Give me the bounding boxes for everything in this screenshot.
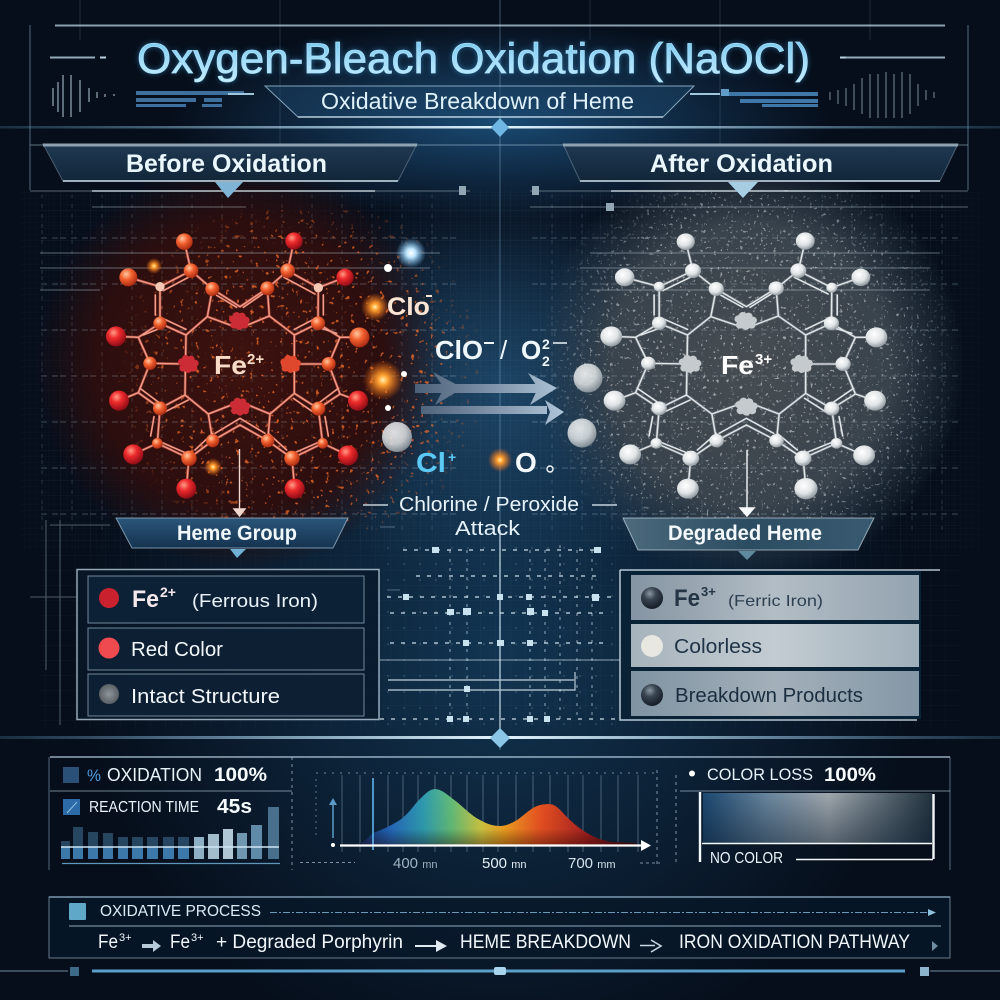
metric: color loss: COLOR LOSS [707, 765, 813, 784]
row: red color: Red Color [131, 639, 223, 661]
spectrum chart: 700 mm [568, 855, 616, 872]
colour loss gauge [700, 792, 934, 867]
header divider with diamond [0, 118, 1000, 137]
metric: reaction time [63, 796, 252, 818]
metric: percent oxidation [63, 765, 267, 786]
attack label: Chlorine / Peroxide [399, 494, 579, 516]
title: Oxygen-Bleach Oxidation (NaOCl) [137, 35, 810, 83]
process pathway: 3+ [119, 932, 132, 944]
footer rule [0, 967, 1000, 976]
metric: reaction time: REACTION TIME [89, 799, 199, 816]
banner: Degraded Heme: Degraded Heme [668, 522, 822, 545]
attack label: Attack [455, 518, 521, 540]
radical label: Cl+: + [448, 449, 456, 465]
label: Fe2+: Fe [214, 350, 247, 380]
banner: After Oxidation: After Oxidation [650, 150, 833, 178]
process pathway: Fe [98, 932, 118, 953]
row: colorless: Colorless [674, 636, 762, 658]
row: red color [88, 628, 364, 670]
data blocks right [690, 89, 818, 107]
label: Fe3+: Fe [721, 350, 754, 380]
label: Fe3+ [721, 350, 772, 380]
reagent label: ClO- / O2 2-: ClO [435, 335, 483, 365]
subtitle banner [265, 86, 694, 117]
reagent label: ClO- / O2 2-: 2 [542, 336, 550, 352]
radical label: Cl+ [416, 447, 456, 478]
panel glow: red molecule backdrop [20, 150, 500, 580]
row: breakdown products [631, 671, 919, 716]
panel: heme group properties [77, 570, 379, 720]
process pathway: 3+ [191, 932, 204, 944]
data blocks left [136, 91, 254, 107]
row: Fe3+ ferric iron: (Ferric Iron) [728, 593, 823, 610]
grid lines behind molecules [30, 186, 968, 535]
label: Fe2+: 2+ [247, 351, 264, 368]
metric: color loss [689, 765, 876, 786]
reagent label: ClO- / O2 2- [435, 335, 567, 369]
glow sparks between panels [146, 238, 512, 476]
banner: Degraded Heme [623, 518, 874, 560]
reaction arrows [415, 372, 564, 425]
main lower divider [0, 728, 1000, 748]
banner: Before Oxidation [43, 144, 417, 198]
reagent label: ClO-: Clo [387, 293, 430, 321]
banner: Heme Group: Heme Group [177, 522, 297, 545]
spectrum chart: 500 mn [482, 855, 526, 872]
particles: orange sparks [116, 210, 486, 530]
process pathway: IRON OXIDATION PATHWAY [679, 932, 910, 953]
bonds: white skeleton [611, 241, 876, 489]
row: Fe3+ ferric iron: 3+ [701, 584, 716, 599]
radical label: O. [515, 447, 553, 478]
metric: percent oxidation: % [87, 766, 101, 785]
title: Oxygen-Bleach Oxidation (NaOCl) [137, 35, 810, 83]
atoms: inner white [641, 263, 851, 466]
reagent label: ClO- / O2 2-: 2 [542, 353, 550, 369]
iron clusters: red [178, 312, 301, 416]
row: Fe2+ ferrous iron: (Ferrous Iron) [192, 591, 318, 611]
row: colorless [631, 624, 919, 667]
spectrum chart: 400 mn [393, 855, 437, 872]
row: Fe3+ ferric iron: Fe [674, 585, 700, 612]
metric: color loss: 100% [824, 765, 876, 786]
radical label: Cl+: Cl [416, 447, 446, 478]
atoms: outer red [106, 232, 369, 499]
waveform left [53, 75, 114, 117]
label: Fe3+: 3+ [755, 351, 772, 368]
attack label [363, 494, 617, 540]
panel: degraded heme properties [620, 570, 940, 720]
subtitle banner: Oxidative Breakdown of Heme [321, 88, 634, 114]
arrow: molecule to heme group [234, 449, 245, 516]
process heading [69, 903, 936, 920]
row: intact structure [88, 674, 364, 716]
panel: oxidative process [49, 897, 950, 958]
row: Fe2+ ferrous iron: Fe [132, 586, 159, 613]
process pathway: + Degraded Porphyrin [216, 932, 403, 953]
molecule: red heme group before oxidation [106, 232, 369, 499]
spectrum chart [300, 773, 660, 872]
row: breakdown products: Breakdown Products [675, 685, 863, 707]
row: intact structure: Intact Structure [131, 686, 280, 708]
radical label: O.: O [515, 447, 537, 478]
iron clusters: white [679, 312, 813, 416]
side grid left lower [30, 520, 400, 725]
molecule: grey degraded heme after oxidation [600, 232, 887, 499]
process pathway [98, 932, 938, 953]
metric: reaction time: 45s [217, 796, 252, 818]
colour loss gauge: NO COLOR [710, 850, 783, 867]
panel glow: grey molecule backdrop [520, 140, 990, 590]
particles: white dust [540, 190, 960, 530]
metrics frame lines [50, 757, 950, 870]
atoms: inner orange [143, 263, 336, 466]
process pathway: Fe [170, 932, 190, 953]
row: Fe2+ ferrous iron: 2+ [160, 584, 176, 600]
label: Fe2+ [214, 350, 264, 380]
centre dotted grid [380, 530, 620, 730]
metric: percent oxidation: OXIDATION [107, 765, 202, 785]
metric: percent oxidation: 100% [214, 765, 267, 786]
row: Fe3+ ferric iron [631, 575, 919, 620]
process heading: OXIDATIVE PROCESS [100, 903, 261, 920]
banner: Before Oxidation: Before Oxidation [126, 150, 327, 178]
arrow: molecule to degraded heme [740, 450, 754, 516]
banner: After Oxidation [563, 144, 958, 198]
banner: Heme Group [116, 518, 348, 558]
waveform right [830, 72, 934, 118]
bar chart [61, 807, 280, 864]
header frame lines [50, 26, 945, 58]
row: Fe2+ ferrous iron [88, 576, 364, 623]
bonds: red skeleton [116, 241, 359, 489]
bubble atoms around the arrows [382, 364, 602, 452]
atoms: outer white [600, 232, 887, 499]
process pathway: HEME BREAKDOWN [460, 932, 631, 953]
reagent label: ClO- / O2 2-: / [500, 335, 508, 365]
reagent label: ClO- / O2 2-: O [521, 335, 541, 365]
